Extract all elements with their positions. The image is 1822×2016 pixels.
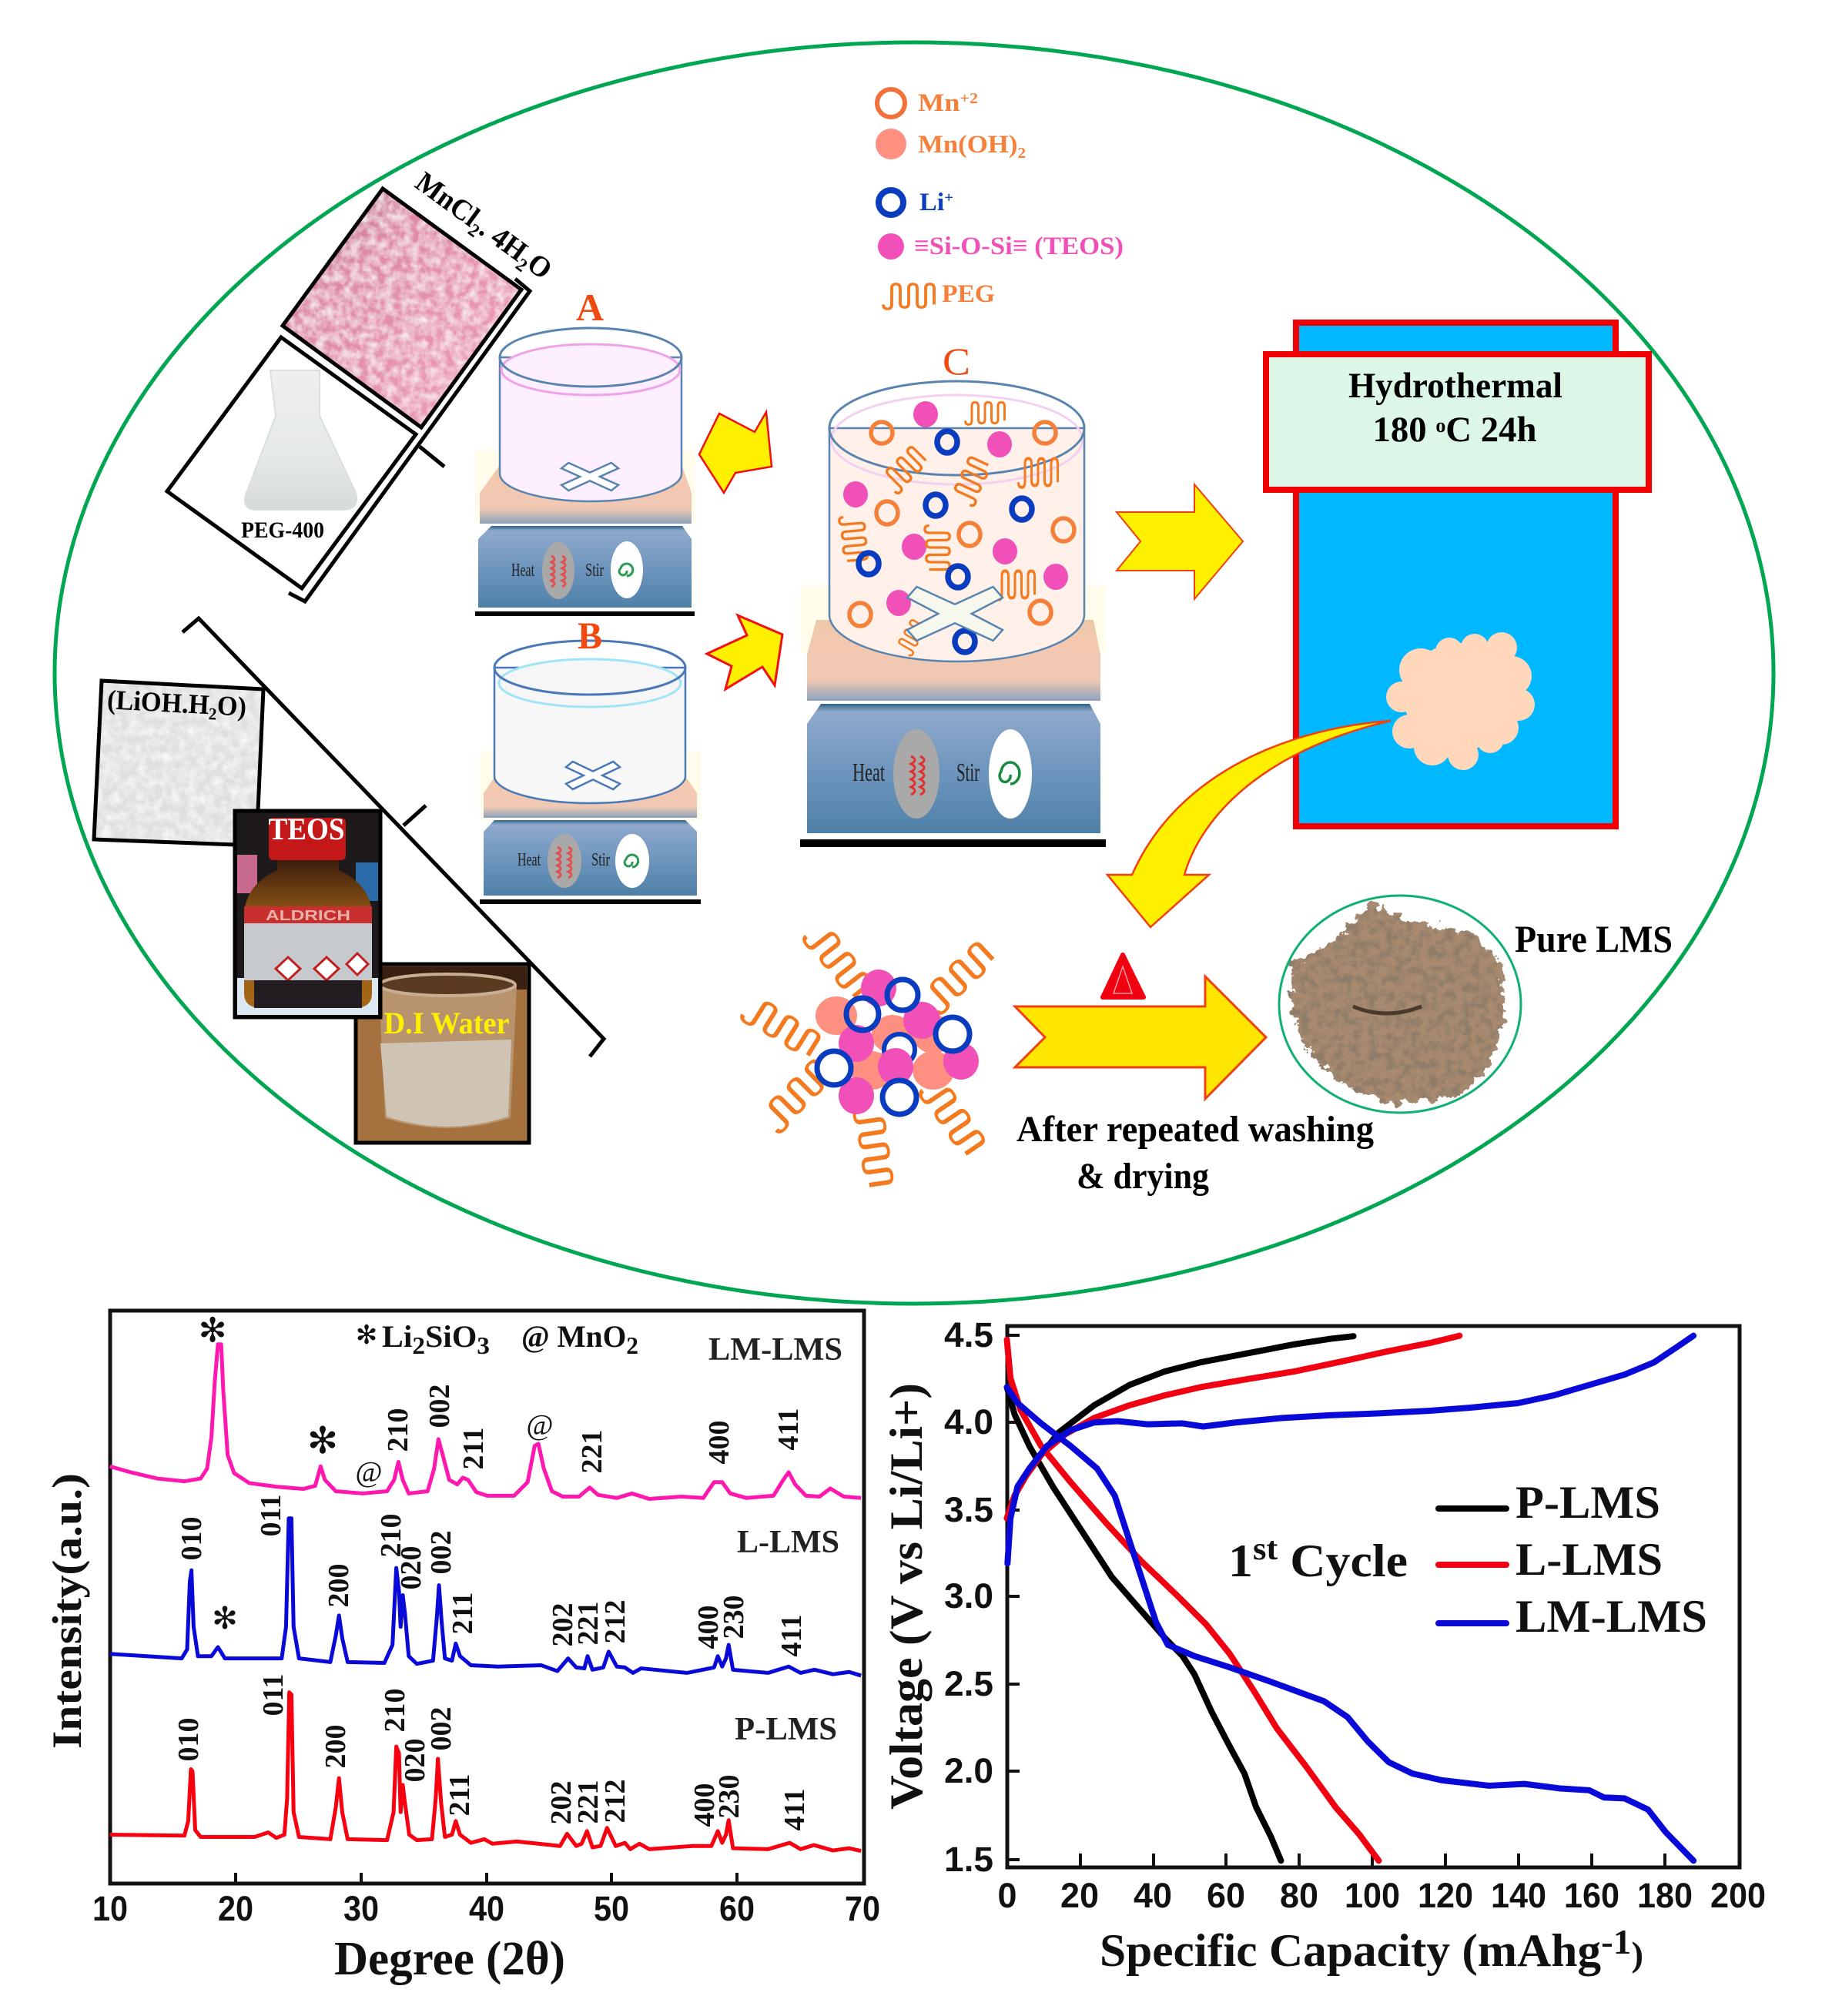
molecules: Mn rings (849, 422, 1074, 626)
legend text: Mn2+: +2 (960, 90, 978, 107)
voltage x tick labels: 80 (1280, 1876, 1318, 1915)
series label P-LMS: P-LMS (735, 1712, 837, 1747)
XRD peak labels: L-LMS: 010 (176, 1517, 208, 1560)
XRD x tick labels: 20 (218, 1889, 253, 1928)
stirrer C (907, 587, 1003, 641)
panel: PEG-400 flask box (167, 337, 416, 588)
text: 180 C 24h: o (1435, 414, 1445, 437)
XRD peak labels: LM-LMS: 221 (576, 1429, 608, 1474)
panel: green synthesis ellipse (55, 42, 1773, 1304)
XRD peak labels: P-LMS: 221 (572, 1780, 605, 1823)
voltage y tick labels: 3.5 (944, 1490, 993, 1529)
XRD legend (356, 1319, 638, 1359)
panel: DI water beaker photo (356, 964, 529, 1143)
legend text: Li+: Li (919, 189, 943, 216)
XRD peak labels: P-LMS: 212 (599, 1779, 631, 1823)
voltage legend: L-LMS (1516, 1534, 1663, 1585)
chart: voltage vs capacity (881, 1315, 1766, 1976)
text: 1st Cycle: Cycle (1278, 1535, 1408, 1586)
arrow: curved from vessel to product (1107, 721, 1391, 927)
voltage y tick labels: 4.0 (944, 1402, 993, 1442)
label: Heat A: Heat (511, 561, 534, 581)
label: MnCl2.4H2O: 2 (512, 255, 531, 276)
legend: species (876, 89, 1124, 309)
voltage x tick labels: 0 (998, 1876, 1017, 1915)
label: B: B (578, 614, 602, 657)
label: Heat C: Heat (852, 759, 885, 787)
text: 1st Cycle: st (1253, 1532, 1278, 1567)
XRD peak labels: P-LMS: 202 (545, 1780, 578, 1825)
XRD peak labels: P-LMS: 211 (444, 1774, 476, 1816)
voltage legend: LM-LMS (1516, 1591, 1707, 1642)
XRD trace: L-LMS (110, 1519, 861, 1676)
panel: hydrothermal vessel (1266, 323, 1649, 826)
legend text: Mn(OH)2: Mn(OH) (918, 131, 1013, 159)
voltage y tick labels (944, 1315, 993, 1879)
text: 180 C 24h: 180 (1372, 410, 1427, 450)
XRD peak labels: L-LMS: 221 (572, 1602, 605, 1645)
molecules: TEOS dots (843, 401, 1068, 616)
voltage y tick labels: 1.5 (944, 1840, 993, 1879)
voltage y tick labels: 2.0 (944, 1751, 993, 1790)
voltage x tick labels: 60 (1207, 1876, 1245, 1915)
label: ALDRICH: ALDRICH (266, 908, 350, 923)
voltage x tick labels: 160 (1564, 1876, 1619, 1915)
text: 180 C 24h: C 24h (1445, 410, 1537, 450)
XRD peak labels: LM-LMS (382, 1385, 805, 1474)
XRD peak labels: L-LMS: 411 (775, 1615, 808, 1656)
label: MnCl2.4H2O: O (521, 247, 558, 286)
voltage x tick labels: 120 (1418, 1876, 1473, 1915)
XRD peak labels: LM-LMS: 210 (382, 1408, 414, 1452)
text: 1st Cycle: 1 (1228, 1535, 1251, 1586)
cluster inner blue ring (884, 1034, 915, 1065)
XRD legend: ✻ (356, 1320, 377, 1351)
voltage x tick labels: 140 (1491, 1876, 1546, 1915)
XRD peak labels: L-LMS: 211 (447, 1592, 479, 1634)
panel: TEOS bottle photo (235, 811, 380, 1017)
phase markers: ✻ (199, 1311, 226, 1351)
XRD peak labels: P-LMS (172, 1674, 811, 1830)
label: Stir B: Stir (591, 850, 610, 870)
icon: heat triangle (1103, 955, 1144, 997)
arrow: A to C (699, 412, 772, 493)
voltage x tick labels (998, 1876, 1766, 1915)
XRD peak labels: L-LMS: 210 (375, 1514, 407, 1557)
text: and drying: & drying (1077, 1156, 1209, 1197)
label: D.I Water: D.I Water (383, 1006, 510, 1040)
label: LiOH.H2O: 2 (208, 704, 217, 724)
XRD peak labels: P-LMS: 002 (425, 1706, 457, 1751)
XRD peak labels: P-LMS: 210 (379, 1688, 411, 1733)
XRD peak labels: P-LMS: 230 (713, 1774, 745, 1819)
XRD peak labels: L-LMS: 212 (599, 1600, 631, 1643)
XRD peak labels: P-LMS: 020 (399, 1739, 431, 1782)
XRD x tick labels: 40 (469, 1889, 504, 1928)
legend text: Mn2+: Mn (918, 89, 956, 117)
label: MnCl2.4H2O: . 4H (474, 213, 533, 268)
label: Stir C: Stir (956, 759, 980, 787)
legend text: TEOS: ≡Si-O-Si≡ (TEOS) (914, 233, 1124, 260)
XRD peak labels: P-LMS: 011 (257, 1674, 290, 1716)
bracket: lower reagents (183, 618, 604, 1057)
voltage y tick labels: 3.0 (944, 1576, 993, 1616)
XRD legend: 3 (477, 1331, 490, 1359)
curve: P-LMS charge and discharge (1007, 1336, 1354, 1860)
label: PEG-400: PEG-400 (241, 517, 324, 543)
arrow: B to C (707, 615, 782, 689)
legend text: Li+: + (944, 189, 953, 206)
XRD peak labels: P-LMS: 010 (172, 1717, 205, 1762)
label: C: C (943, 340, 970, 383)
voltage x tick labels: 20 (1060, 1876, 1099, 1915)
phase markers (199, 1311, 553, 1636)
XRD peak labels: L-LMS: 230 (718, 1596, 750, 1639)
phase markers: ✻ (212, 1601, 238, 1636)
panel: LiOH powder photo (94, 681, 263, 846)
XRD legend: @ MnO (521, 1319, 628, 1354)
molecules: PEG chains (839, 402, 1058, 656)
series label L-LMS: L-LMS (737, 1525, 839, 1560)
hydrothermal cap (1266, 354, 1649, 490)
XRD legend: SiO (425, 1319, 477, 1354)
voltage x tick labels: 40 (1134, 1876, 1172, 1915)
voltage y-axis title: Voltage (V vs Li/Li+) (881, 1383, 932, 1810)
voltage x tick labels: 200 (1710, 1876, 1766, 1915)
legend text: Mn(OH)2: 2 (1017, 145, 1026, 162)
XRD x tick labels: 60 (719, 1889, 755, 1928)
XRD legend: 2 (412, 1331, 425, 1359)
hot plate B with water beaker (480, 641, 701, 904)
label: TEOS: TEOS (268, 812, 345, 846)
phase markers: ✻ (307, 1419, 338, 1462)
XRD peak labels: L-LMS: 202 (547, 1603, 579, 1646)
label: MnCl2.4H2O: MnCl (410, 166, 487, 235)
curve: LM-LMS charge and discharge (1007, 1336, 1693, 1860)
XRD legend: Li (382, 1319, 411, 1354)
XRD trace: LM-LMS (110, 1345, 861, 1499)
XRD peak labels: L-LMS: 400 (692, 1605, 725, 1649)
XRD x tick labels: 30 (343, 1889, 379, 1928)
XRD peak labels: L-LMS: 200 (323, 1563, 355, 1608)
phase markers: @ (527, 1409, 553, 1442)
XRD peak labels: P-LMS: 400 (688, 1783, 721, 1827)
voltage legend (1439, 1477, 1707, 1642)
voltage x tick labels: 180 (1637, 1876, 1693, 1915)
XRD x-axis title: Degree (2θ) (334, 1933, 565, 1985)
XRD peak labels: L-LMS: 020 (395, 1546, 427, 1589)
XRD y-axis title: Intensity(a.u.) (44, 1473, 90, 1749)
XRD peak labels: L-LMS (176, 1495, 808, 1656)
label: LiOH.H2O: O) (216, 690, 247, 722)
voltage x-axis title: Specific Capacity (mAhg (1100, 1925, 1590, 1976)
XRD legend: 2 (626, 1331, 638, 1359)
molecule cluster (741, 922, 996, 1186)
XRD trace: P-LMS (110, 1693, 861, 1851)
text: After repeated washing: After repeated washing (1017, 1109, 1374, 1150)
XRD peak labels: L-LMS: 011 (255, 1495, 287, 1536)
cluster blue rings (817, 980, 970, 1114)
icon: product cloud (1386, 632, 1535, 770)
label: A: A (576, 286, 604, 329)
cluster PEG chains (741, 922, 996, 1186)
XRD peak labels: L-LMS: 002 (425, 1531, 457, 1574)
product: LMS powder in circle (1279, 896, 1521, 1113)
voltage y tick labels: 4.5 (944, 1315, 993, 1355)
XRD x tick labels: 50 (594, 1889, 629, 1928)
hot plate C with mixed solution (800, 381, 1106, 847)
XRD peak labels: LM-LMS: 400 (703, 1420, 735, 1465)
icon: flask (245, 370, 357, 510)
voltage y tick labels: 2.5 (944, 1664, 993, 1703)
XRD x tick labels: 70 (845, 1889, 880, 1928)
voltage x-axis title: ) (1631, 1934, 1643, 1974)
text: Hydrothermal: Hydrothermal (1348, 366, 1562, 406)
hot plate A with pink beaker (475, 328, 695, 616)
chart: XRD patterns (44, 1311, 880, 1985)
cluster salmon particles (816, 996, 954, 1090)
XRD x tick labels: 10 (92, 1889, 128, 1928)
voltage legend: P-LMS (1516, 1477, 1660, 1528)
label: LiOH.H2O: (LiOH.H (106, 684, 215, 721)
XRD x tick labels (92, 1889, 880, 1928)
curve: L-LMS charge and discharge (1007, 1336, 1459, 1860)
arrow: washing and drying (1015, 976, 1266, 1099)
arrow: C to hydrothermal (1117, 484, 1243, 599)
label: Stir A: Stir (585, 561, 604, 581)
voltage x tick labels: 100 (1345, 1876, 1400, 1915)
panel: MnCl2 powder photo (283, 189, 521, 427)
cluster pink particles (839, 969, 979, 1114)
XRD peak labels: LM-LMS: 211 (457, 1428, 490, 1469)
series label LM-LMS: LM-LMS (708, 1332, 842, 1368)
text: Pure LMS: Pure LMS (1515, 917, 1673, 960)
label: Heat B: Heat (517, 850, 541, 870)
label: MnCl2.4H2O: 2 (464, 220, 483, 242)
XRD peak labels: P-LMS: 411 (779, 1789, 811, 1830)
XRD peak labels: P-LMS: 200 (320, 1725, 352, 1768)
bracket: upper reagents (289, 279, 530, 601)
voltage x-axis title: -1 (1601, 1922, 1631, 1961)
legend text: PEG: PEG (942, 280, 995, 308)
molecules: Li rings (859, 431, 1032, 652)
XRD peak labels: LM-LMS: 002 (424, 1385, 456, 1428)
phase markers: @ (356, 1456, 382, 1489)
XRD peak labels: LM-LMS: 411 (772, 1408, 805, 1450)
